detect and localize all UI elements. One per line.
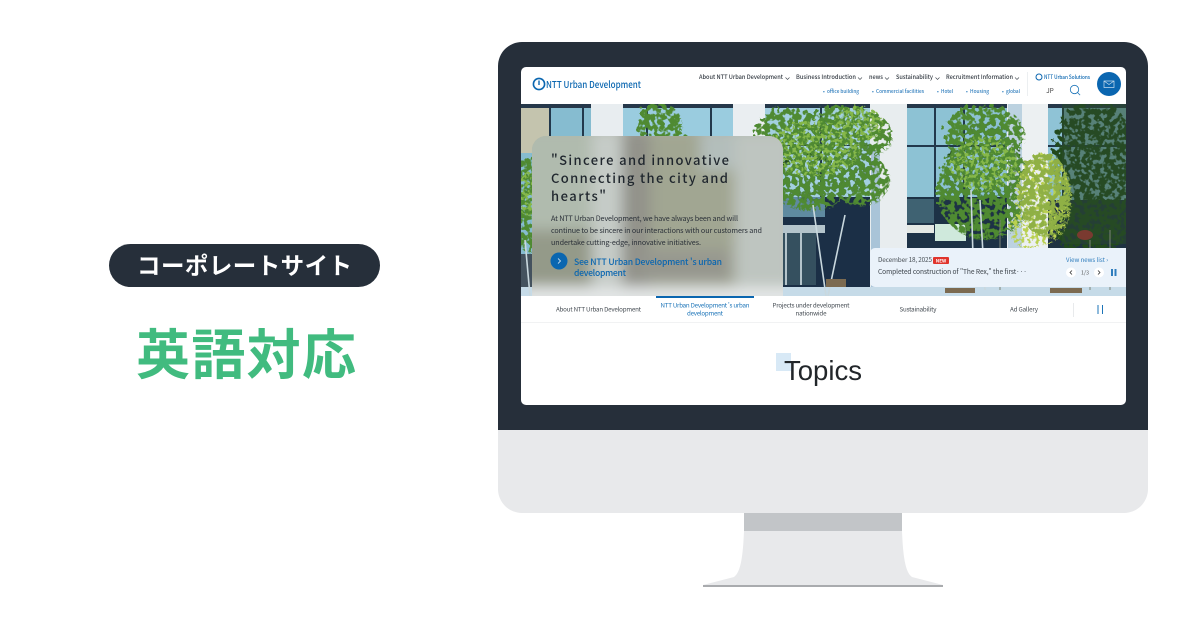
category pill label: コーポレートサイト [137,247,352,281]
hero heading: hearts" [551,186,606,205]
hero heading [551,150,729,205]
tab navigation [521,296,1126,323]
news date: December 18, 2025 [878,255,932,264]
hero link text [574,256,722,279]
hero body text: continue to be sincere in our interactions with our customers and [551,226,762,236]
icon: search [1070,85,1080,95]
news headline: Completed construction of "The Rex," the first··· [878,266,1027,276]
site header [533,72,1121,96]
hero heading: Connecting the city and [551,168,728,187]
monitor chin [498,430,1148,513]
icon: mail button [1097,72,1121,96]
hero body text: undertake cutting-edge, innovative initiatives. [551,238,701,248]
sub navigation: • [937,88,939,95]
sub navigation: Commercial facilities [876,88,925,95]
carousel controls [1066,268,1116,278]
sub navigation: office building [827,88,859,95]
sub navigation: Housing [970,88,989,95]
sub navigation: Hotel [941,88,953,95]
hero photo [510,99,1137,296]
tab navigation: Sustainability [900,304,937,314]
NTT Urban Solutions logo: NTT Urban Solutions [1044,73,1090,81]
hero link text: See NTT Urban Development 's urban [574,256,722,268]
hero body text [551,214,762,248]
monitor bezel [498,42,1148,430]
hero link button [550,252,568,270]
main navigation: Recruitment Information [946,72,1013,81]
tab navigation: Ad Gallery [1010,304,1039,314]
section heading: topics: Topics [784,355,862,386]
tab navigation: About NTT Urban Development [556,304,642,314]
frosted hero panel [532,136,783,296]
tab navigation: NTT Urban Development 's urban [660,300,750,310]
view news list link: View news list › [1066,255,1108,264]
main navigation: Business Introduction [796,72,856,81]
title: english support: 英語対応 [136,311,356,390]
tab pause icon [1098,305,1103,314]
main navigation: About NTT Urban Development [699,72,784,81]
sub navigation [823,88,1020,95]
main navigation: Sustainability [896,72,934,81]
hero link text: development [574,267,627,279]
hero heading: "Sincere and innovative [551,150,729,169]
sub navigation: • [966,88,968,95]
main navigation: news [869,72,883,81]
sub navigation: • [872,88,874,95]
screen [521,67,1126,405]
main navigation [699,72,1019,81]
category pill label [109,244,380,287]
monitor [498,42,1148,587]
sub navigation: global [1006,88,1020,95]
sub navigation: • [1002,88,1004,95]
carousel controls: 1/3 [1081,268,1089,276]
badge: new: NEW [936,258,947,264]
news ticker card [870,248,1126,287]
monitor stand [703,512,943,587]
sub navigation: • [823,88,825,95]
language switch: JP [1046,85,1054,95]
badge: new [933,257,949,264]
tab navigation: development [687,308,724,318]
hero body text: At NTT Urban Development, we have always been and will [551,214,738,224]
active tab indicator [656,296,754,298]
tab navigation: Projects under development [772,300,850,310]
logo: NTT Urban Development [546,77,641,91]
tab navigation: nationwide [796,308,827,318]
